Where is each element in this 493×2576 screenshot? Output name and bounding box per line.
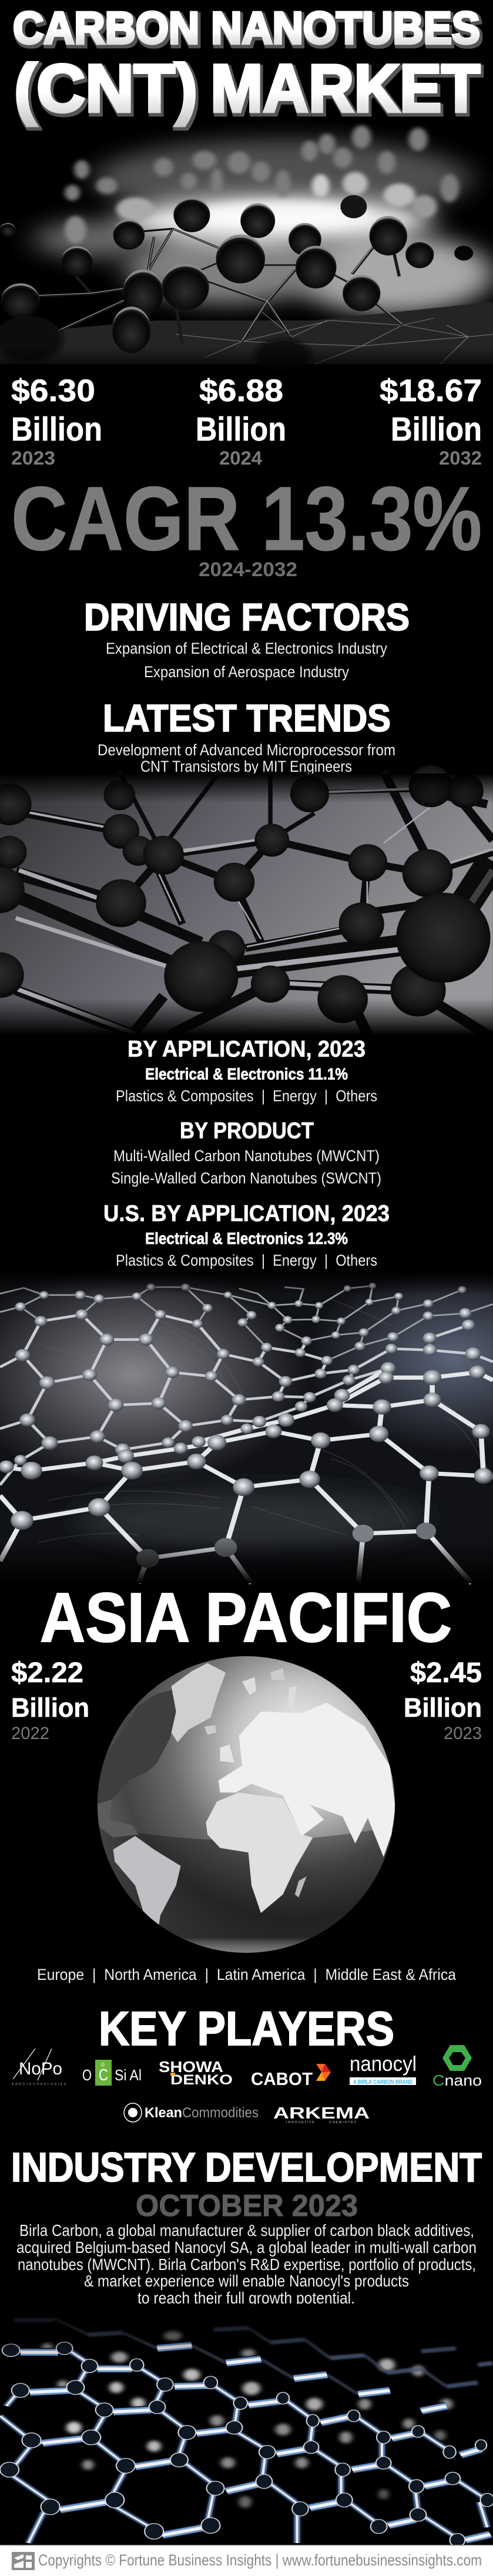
hero image: carbon molecule xyxy=(0,126,493,372)
back rows xyxy=(14,2318,493,2411)
by application 2023: Electrical & Electronics 11.1% xyxy=(145,1065,348,1083)
stat: 2032 value: 2032 xyxy=(439,448,482,469)
by product: Single-Walled Carbon Nanotubes (SWCNT) xyxy=(111,1169,381,1187)
latest trends: CNT Transistors by MIT Engineers xyxy=(140,758,352,775)
stat: 2032 value xyxy=(380,374,482,469)
latest trends: Development of Advanced Microprocessor from xyxy=(98,741,395,759)
by application 2023 xyxy=(116,1037,377,1105)
molecule rods xyxy=(132,228,220,272)
stat: 2023 value: Billion xyxy=(11,411,102,448)
stat: 2032 value: Billion xyxy=(391,411,482,448)
title xyxy=(13,3,480,126)
development description: to reach their full growth potential. xyxy=(137,2289,355,2307)
stat: 2023 value: $6.30 xyxy=(11,374,95,408)
logo: Nopo xyxy=(12,2049,66,2086)
logo: Klean Commodities: Klean xyxy=(145,2105,182,2121)
development description: & market experience will enable Nanocyl's products xyxy=(84,2272,409,2290)
stat: region 2022 xyxy=(11,1657,89,1743)
stat: region 2022: Billion xyxy=(11,1693,89,1723)
by application 2023: Plastics & Composites | Energy | Others xyxy=(116,1087,377,1105)
logo: Nopo: NANOTECHNOLOGIES xyxy=(12,2083,66,2086)
logo: Cnano: Cnano xyxy=(432,2071,482,2089)
logo: OCSiAl xyxy=(82,2060,142,2086)
U.S. by application: Electrical & Electronics 12.3% xyxy=(145,1229,348,1247)
logo: Klean Commodities xyxy=(124,2103,259,2122)
latest trends: LATEST TRENDS xyxy=(103,697,391,739)
driving factors: DRIVING FACTORS xyxy=(84,596,410,638)
region heading: ASIA PACIFIC xyxy=(40,1579,452,1657)
land: north america xyxy=(94,1689,176,1804)
stat: 2023 value xyxy=(11,374,102,469)
stat: 2023 value: 2023 xyxy=(11,448,55,469)
logo: Showa Denko: SHOWA xyxy=(159,2058,223,2076)
stat: 2024 value: Billion xyxy=(196,411,286,448)
stat: 2024 value: $6.88 xyxy=(199,374,283,408)
by application 2023: BY APPLICATION, 2023 xyxy=(128,1037,365,1062)
image: steel hexagon lattice xyxy=(0,2318,493,2547)
logo: Showa Denko: DENKO xyxy=(170,2072,233,2088)
stat: region 2022: 2022 xyxy=(11,1724,49,1743)
main lattice: diagonal and vertical bonds xyxy=(0,2348,487,2543)
logo: Nopo: NoPo xyxy=(19,2059,62,2079)
logo: Arkema: INNOVATIVE xyxy=(286,2121,314,2124)
U.S. by application: Plastics & Composites | Energy | Others xyxy=(116,1252,377,1269)
logo: OCSiAl: C xyxy=(99,2066,108,2084)
logo: Cabot: CABOT xyxy=(251,2069,313,2089)
by product: Multi-Walled Carbon Nanotubes (MWCNT) xyxy=(113,1147,380,1165)
latest trends xyxy=(98,697,395,775)
driving factors xyxy=(84,596,410,681)
stat: 2032 value: $18.67 xyxy=(380,374,482,408)
logo: Cnano xyxy=(432,2045,482,2089)
logo: Nanocyl xyxy=(350,2052,417,2086)
driving factors: Expansion of Aerospace Industry xyxy=(144,663,349,681)
image: graphene lattice xyxy=(0,1272,493,1583)
footer bar xyxy=(0,2545,493,2576)
image: ball and stick molecule xyxy=(0,765,493,1038)
logo: Arkema xyxy=(273,2104,370,2124)
spheres xyxy=(0,195,473,353)
U.S. by application: U.S. BY APPLICATION, 2023 xyxy=(103,1201,390,1226)
stat: region 2023: $2.45 xyxy=(410,1657,482,1689)
land: greenland xyxy=(172,1663,226,1742)
footer logo xyxy=(12,2552,35,2570)
development description xyxy=(16,2221,477,2307)
main lattice: horizontal bars xyxy=(21,2345,491,2540)
stat: 2024 value xyxy=(196,374,286,469)
stat: region 2023: 2023 xyxy=(444,1724,482,1743)
logo: OCSiAl: G xyxy=(101,2062,105,2067)
logo: Arkema: ARKEMA xyxy=(273,2104,370,2122)
title: MARKET xyxy=(210,51,480,126)
stat: region 2023 xyxy=(404,1657,482,1743)
logo: OCSiAl: O xyxy=(82,2066,92,2084)
development date: OCTOBER 2023 xyxy=(136,2189,358,2223)
logo: Klean Commodities: Commodities xyxy=(182,2105,259,2121)
stat: region 2023: Billion xyxy=(404,1693,482,1723)
other regions: Europe | North America | Latin America | Middle East & Africa xyxy=(37,1966,457,1983)
globe xyxy=(94,1656,399,1958)
CAGR period: 2024-2032 xyxy=(199,559,297,581)
land: madagascar xyxy=(295,1876,307,1898)
logo: Nanocyl: nanocyl xyxy=(350,2052,417,2076)
key players heading: KEY PLAYERS xyxy=(99,2002,394,2056)
by product: BY PRODUCT xyxy=(180,1118,314,1144)
land: south america xyxy=(113,1836,181,1926)
driving factors: Expansion of Electrical & Electronics Industry xyxy=(106,640,387,657)
land: iceland xyxy=(204,1725,216,1735)
stat: region 2022: $2.22 xyxy=(11,1657,83,1689)
land: eurasia xyxy=(219,1703,395,1857)
stat: 2024 value: 2024 xyxy=(219,448,262,469)
logo: Nanocyl: A BIRLA CARBON BRAND xyxy=(353,2079,412,2086)
logo: Cabot xyxy=(251,2064,331,2089)
bokeh xyxy=(42,2331,452,2508)
logo: Showa Denko xyxy=(159,2058,233,2088)
land: africa xyxy=(206,1793,313,1913)
by product xyxy=(111,1118,381,1187)
logo: OCSiAl: Si Al xyxy=(115,2066,142,2084)
title: (CNT) xyxy=(14,51,197,126)
logo: Arkema: CHEMISTRY xyxy=(329,2121,356,2124)
bottom floor xyxy=(0,302,493,364)
U.S. by application xyxy=(103,1201,390,1269)
